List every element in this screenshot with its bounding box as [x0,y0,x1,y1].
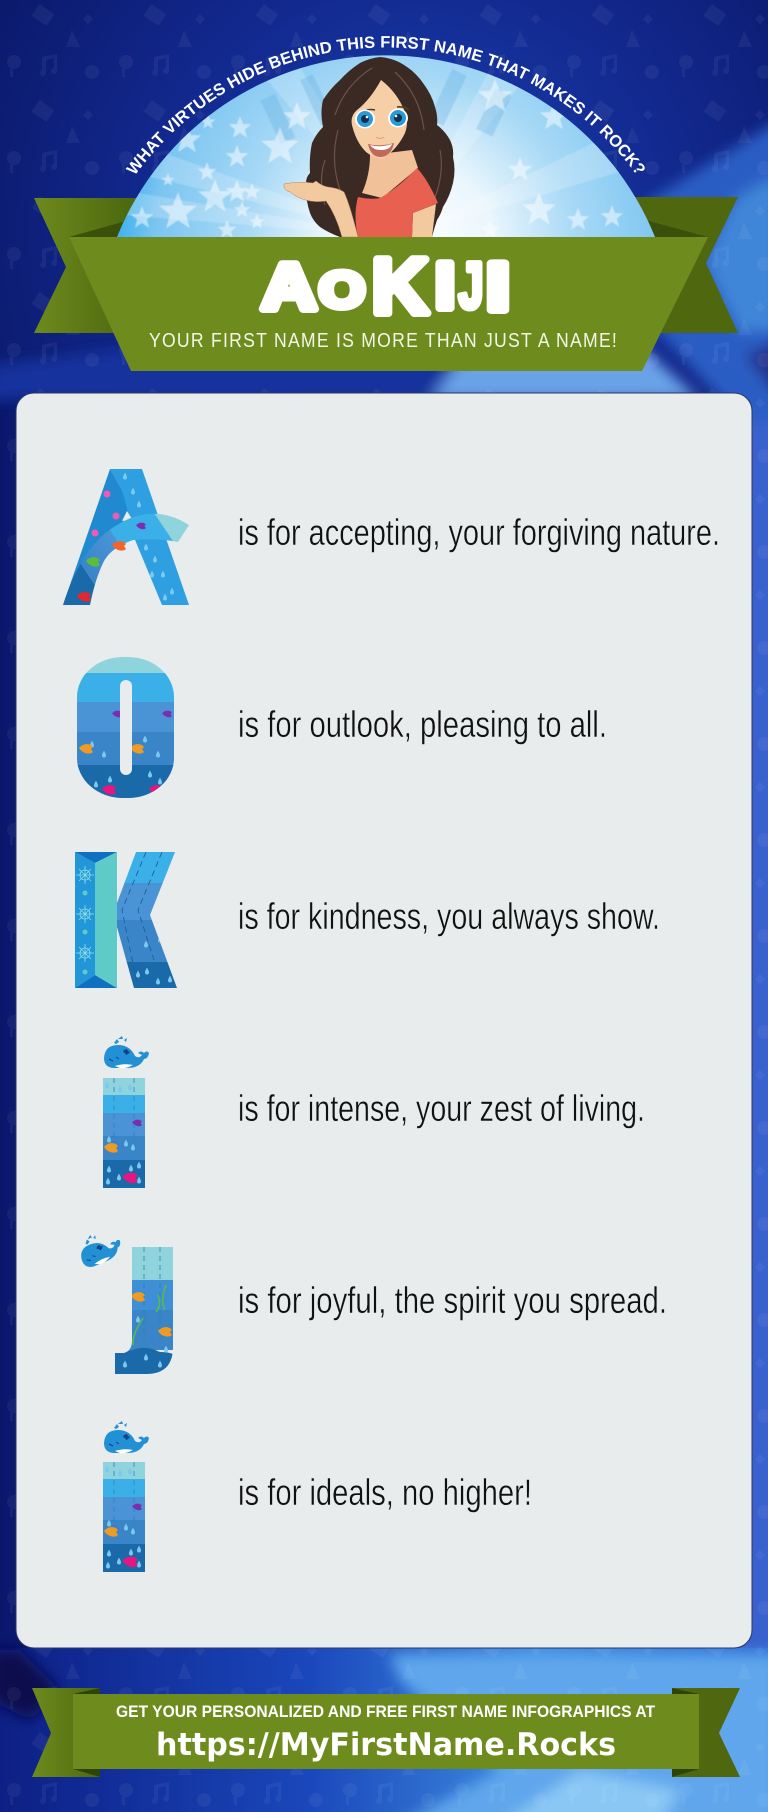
header dome illustration [100,50,660,238]
letter A art [63,469,189,605]
name title [262,242,510,330]
ribbon left tail [32,1688,100,1777]
ribbon right tail [560,197,738,333]
ribbon front [73,1694,699,1769]
letter J art [115,1247,175,1376]
second letter I row [103,1421,532,1572]
letter I art [103,1462,145,1572]
name title: I [435,249,455,322]
name title: A [262,250,316,323]
character illustration [284,57,454,237]
ribbon folds [69,220,708,237]
whale icon [104,1421,149,1454]
letter O art [77,657,174,798]
right eye [388,108,408,128]
footer call to action: GET YOUR PERSONALIZED AND FREE FIRST NAME INFOGRAPHICS AT [116,1702,656,1721]
text O: is for outlook, pleasing to all. [238,704,607,745]
name title: J [458,249,484,322]
letter A row [63,469,720,605]
left eye [355,110,375,128]
panel: letter meanings [16,393,752,1648]
arched tagline: WHAT VIRTUES HIDE BEHIND THIS FIRST NAME THAT MAKES IT ROCK? [126,36,645,174]
top ribbon tails [34,197,738,333]
mouth [368,143,394,157]
letter J row [74,1226,667,1376]
neck [362,150,418,198]
right arm [412,204,436,237]
hair [306,57,454,237]
buildings silhouette [261,69,511,144]
name title: O [319,262,365,318]
name title: I [486,249,510,325]
text J: is for joyful, the spirit you spread. [238,1280,667,1321]
stars [131,79,623,238]
whale icon [74,1226,125,1270]
brows [359,107,409,114]
letter I row [103,1036,645,1188]
letter K row [75,852,660,988]
ribbon right tail [672,1688,740,1777]
light rays [126,68,618,228]
arm and hand [284,181,358,237]
face [352,80,407,158]
top ribbon banner [69,237,708,371]
whale icon [104,1036,149,1068]
shirt [356,168,438,237]
text I: is for intense, your zest of living. [238,1088,645,1129]
text I: is for ideals, no higher! [238,1472,532,1513]
nose [376,137,384,138]
subtitle: YOUR FIRST NAME IS MORE THAN JUST A NAME! [149,330,617,352]
ribbon left tail [34,198,220,333]
ribbon front [69,237,708,371]
text K: is for kindness, you always show. [238,896,660,937]
letter I art [103,1078,145,1188]
letter O row [77,657,607,798]
footer ribbon banner [32,1688,740,1777]
name title: K [372,242,428,330]
ribbon folds [73,1688,699,1777]
hair parting lock [345,78,381,135]
letter K art [75,852,180,988]
footer url: https://MyFirstName.Rocks [156,1727,616,1763]
